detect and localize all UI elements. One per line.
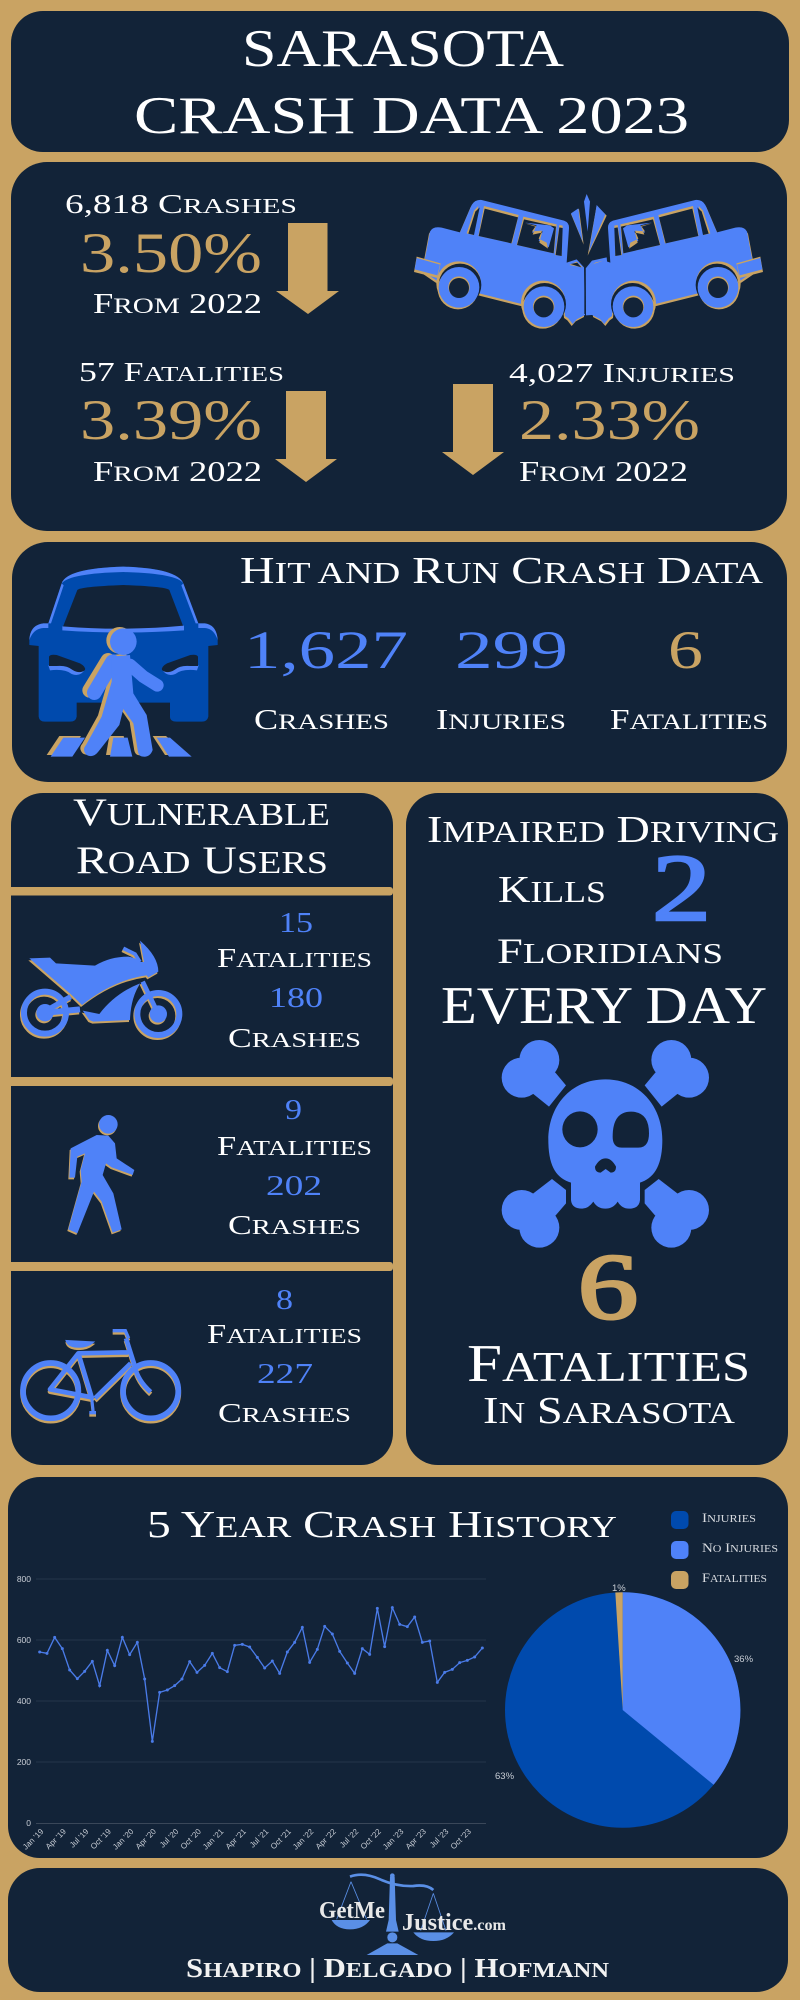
line chart: monthly crashes: Jan '23 [381, 1827, 406, 1851]
panel: hit and run crash data [12, 542, 787, 782]
line chart: monthly crashes: Jan '22 [291, 1827, 316, 1851]
icon: bicycle [23, 1331, 178, 1421]
arrow: crashes down [276, 223, 339, 314]
pie chart [495, 1583, 754, 1828]
row: pedestrian [67, 1095, 372, 1240]
row: motorcycle: FATALITIES [217, 943, 372, 973]
text: fatalities: FATALITIES [467, 1335, 750, 1393]
row: pedestrian: 202 [266, 1171, 322, 1202]
line chart: monthly crashes: Apr '22 [314, 1827, 338, 1851]
line chart: monthly crashes: Oct '20 [179, 1827, 203, 1851]
title line 2: CRASH DATA 2023 [134, 87, 689, 145]
stat: 6 fatalities: 6 [668, 620, 703, 680]
injuries from 2022: FROM 2022 [519, 457, 688, 488]
line chart: monthly crashes: Jul '19 [68, 1827, 91, 1850]
line chart: monthly crashes: Apr '21 [224, 1827, 248, 1851]
line chart: monthly crashes: Oct '22 [359, 1827, 383, 1851]
line chart: monthly crashes: Jul '23 [428, 1827, 451, 1850]
line chart: monthly crashes: Jul '20 [158, 1827, 181, 1850]
line chart: monthly crashes: Oct '23 [449, 1827, 473, 1851]
line chart: monthly crashes: Jan '19 [21, 1827, 46, 1851]
text: in sarasota: IN SARASOTA [483, 1390, 735, 1432]
line chart: monthly crashes: 600 [17, 1635, 31, 1645]
pie chart: 63% [495, 1771, 515, 1782]
stat: 299 injuries: INJURIES [436, 705, 566, 736]
text: every day: EVERY DAY [441, 977, 767, 1035]
line chart: monthly crashes: 0 [26, 1818, 31, 1828]
crashes percent: 3.50% [80, 222, 262, 285]
injuries percent: 2.33% [519, 389, 700, 452]
stat: 6 fatalities [610, 620, 768, 736]
row: motorcycle: 15 [279, 908, 313, 939]
icon: motorcycle [23, 941, 179, 1037]
row: bicycle [23, 1285, 362, 1428]
line chart: monthly crashes: Apr '19 [44, 1827, 68, 1851]
row: pedestrian: C RASHES [228, 1210, 361, 1240]
line chart: monthly crashes: Oct '21 [269, 1827, 293, 1851]
line chart: monthly crashes: 800 [17, 1574, 31, 1584]
row: pedestrian: FATALITIES [217, 1131, 372, 1161]
firm names: SHAPIRO | DELGADO | H OFMANN [186, 1953, 609, 1983]
row: motorcycle [23, 908, 372, 1053]
text: floridians: FLORIDIANS [497, 931, 723, 971]
fatalities stat label: 57 F ATALITIES [79, 357, 284, 387]
number: 2: 2 [652, 835, 711, 941]
line chart: monthly crashes: 400 [17, 1696, 31, 1706]
pie chart: 36% [734, 1654, 754, 1665]
panel: vulnerable road users [4, 791, 393, 1465]
stat: 299 injuries [436, 620, 568, 736]
icon: two cars crashing [414, 194, 763, 329]
line chart: monthly crashes: Oct '19 [89, 1827, 113, 1851]
line chart: monthly crashes: Apr '20 [134, 1827, 158, 1851]
arrow: fatalities down [275, 391, 337, 482]
number: 6: 6 [578, 1236, 638, 1339]
heading: vulnerable road users: ROAD U SERS [76, 839, 328, 882]
heading: vulnerable road users [73, 791, 330, 882]
stat: 1,627 crashes: 1,627 [244, 620, 408, 680]
row: motorcycle: C RASHES [228, 1023, 361, 1053]
panel: footer logo [8, 1868, 788, 1992]
title line 1: SARASOTA [242, 20, 564, 78]
panel: impaired driving [406, 793, 788, 1465]
icon: scales of justice [332, 1873, 454, 1955]
stat: 1,627 crashes [244, 620, 408, 736]
panel: 5 year crash history [8, 1477, 788, 1858]
icon: pedestrian [67, 1115, 134, 1235]
logo text: Justice.com: Justice.com [402, 1910, 507, 1936]
crashes from 2022: FROM 2022 [93, 289, 262, 320]
line chart: monthly crashes: Jan '21 [201, 1827, 226, 1851]
row: bicycle: 8 [276, 1285, 293, 1316]
row: bicycle: C RASHES [218, 1398, 351, 1428]
fatalities percent: 3.39% [80, 389, 262, 452]
fatalities from 2022: FROM 2022 [93, 457, 262, 488]
icon: car and pedestrian [29, 567, 218, 757]
heading: vulnerable road users: VULNERABLE [73, 791, 330, 834]
heading: 5 year crash history: 5 Y EAR C RASH H ISTORY [147, 1504, 617, 1546]
row: bicycle: 227 [257, 1359, 313, 1390]
arrow: injuries down [442, 384, 504, 475]
stat: 299 injuries: 299 [455, 620, 568, 680]
panel: title [11, 11, 789, 152]
stat: 1,627 crashes: CRASHES [254, 705, 389, 736]
line chart: monthly crashes: Jul '21 [248, 1827, 271, 1850]
icon: skull and crossbones [502, 1040, 709, 1248]
panel: overall crash stats [11, 162, 787, 531]
pie chart: 1% [612, 1583, 626, 1594]
text: kills: KILLS [498, 869, 606, 911]
line chart: monthly crashes: Jan '20 [111, 1827, 136, 1851]
line chart: monthly crashes: Apr '23 [404, 1827, 428, 1851]
line chart: monthly crashes [17, 1574, 486, 1851]
legend [671, 1511, 778, 1589]
text: impaired driving: IMPAIRED D RIVING [427, 809, 779, 851]
row: pedestrian: 9 [285, 1095, 302, 1126]
legend: NO INJURIES [702, 1541, 778, 1555]
legend: INJURIES [702, 1511, 756, 1525]
row: bicycle: FATALITIES [207, 1319, 362, 1349]
line chart: monthly crashes: Jul '22 [338, 1827, 361, 1850]
logo text: GetMe: GetMe [319, 1898, 385, 1924]
line chart: monthly crashes: 200 [17, 1757, 31, 1767]
injuries stat label: 4,027 I NJURIES [509, 358, 735, 388]
heading: hit and run: HIT AND R UN C RASH D ATA [240, 550, 763, 592]
stat: 6 fatalities: FATALITIES [610, 705, 768, 736]
legend: FATALITIES [702, 1571, 767, 1585]
row: motorcycle: 180 [269, 983, 323, 1014]
crashes stat label: 6,818 C RASHES [65, 189, 297, 219]
